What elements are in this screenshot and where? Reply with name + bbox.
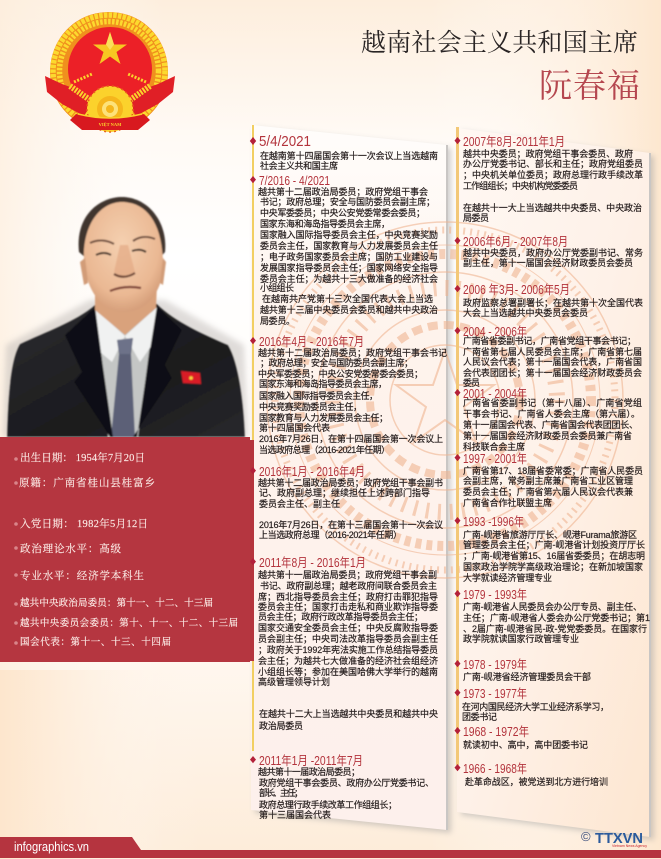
entry: 2011年8月 - 2016年1月: 员会副主任；中央司法改革指导委员会副主任 [258, 633, 438, 644]
info: party join date: 入党日期： 1982年5月12日 [20, 517, 148, 530]
logo: TTXVN [581, 829, 647, 848]
entry: 2016年4月 - 2016年7月 [250, 335, 447, 455]
entry: 7/2016 - 4/2021: 越共第十三届中央委员会委员和越共中央政治 [260, 304, 438, 315]
entry: 2007年8月-2011年1月: ；中央机关单位委员；政府总理行政手续改革 [463, 169, 643, 180]
entry: 2001 - 2004年: 广南省省委副书记（第十八届）、广南省党组 [463, 397, 642, 408]
entry: 7/2016 - 4/2021: 国家融入国际指导委员会主任，中央竞赛奖励 [260, 229, 438, 240]
panel: personal information [0, 437, 250, 662]
entry: 7/2016 - 4/2021: 中央军委委员；中央公安党委常委会委员； [260, 207, 425, 218]
entry: 2011年8月 - 2016年1月: 高级管理领导计划 [258, 676, 330, 687]
entry: 2006年3月 - 2006年5月: 2006 年3月- 2006年5月 [463, 283, 570, 297]
entry: 1978 - 1979年: 1978 - 1979年 [463, 658, 527, 672]
entry: 1966 - 1968年: 赴革命战区，被党送到北方进行培训 [465, 776, 608, 787]
entry: 7/2016 - 4/2021: 书记；政府总理；安全与国防委员会副主席； [260, 196, 435, 207]
entry: 1993 -1996年: 国家政治学院学高级政治理论；在新加坡国家 [463, 561, 643, 572]
entry: 2016年1月 - 2016年4月: 2016年1月 - 2016年4月 [259, 465, 365, 479]
entry: 2007年8月-2011年1月: 越共中央委员；政府党组干事会委员、政府 [463, 148, 633, 159]
entry: 7/2016 - 4/2021: 7/2016 - 4/2021 [259, 174, 330, 188]
entry: 1979 - 1993年 [454, 588, 650, 644]
entry: 2011年1月 -2011年7月: 部长、主任； [259, 787, 303, 798]
entry: 2011年1月 -2011年7月: 越共第十一届政治局委员； [258, 766, 360, 777]
icon: national emblem of Vietnam [45, 12, 175, 132]
entry: 2011年8月 - 2016年1月: 2011年8月 - 2016年1月 [259, 556, 366, 570]
entry: 2016年1月 - 2016年4月: 2016年7月26日，在第十三届国会第十一次会议 [259, 519, 443, 530]
entry: 2016年1月 - 2016年4月: 委员会主任、副主任 [259, 498, 340, 509]
entry: 7/2016 - 4/2021: 委员会主任；为越共十三大做准备的经济社会 [260, 273, 438, 284]
entry: 2006年3月 - 2006年5月: 大会上当选越共中央委员会委员 [463, 307, 588, 318]
entry: 5/4/2021: 在越南第十四届国会第十一次会议上当选越南 [260, 150, 438, 161]
title [361, 29, 640, 105]
entry: 2011年8月 - 2016年1月: ；政府关于1992年宪法实施工作总结指导委员 [258, 644, 438, 655]
entry: 2004 - 2006年: 会代表团团长；第十一届国会经济财政委员会 [463, 367, 642, 378]
entry: 7/2016 - 4/2021: 小组组长 [260, 282, 294, 293]
entry: 2004 - 2006年: 人民议会代表；第十一届国会代表，广南省国 [463, 356, 642, 367]
entry: 1993 -1996年 [454, 515, 645, 583]
entry: 2011年8月 - 2016年1月: 席；西北指导委员会主任；政府打击罪犯指导 [258, 591, 438, 602]
entry: 1979 - 1993年: 主任；广南-岘港省人委会办公厅党委书记；第1 [463, 612, 650, 623]
entry: 2007年8月-2011年1月: 在越共十一大上当选越共中央委员、中央政治 [463, 202, 642, 213]
panel: left timeline paper [251, 125, 451, 833]
entry: 7/2016 - 4/2021: ；电子政务国家委员会主席；国防工业建设与 [260, 251, 438, 262]
entry: 2011年1月 -2011年7月 [250, 754, 434, 820]
entry: 1973 - 1977年: 在河内国民经济大学工业经济系学习， [462, 701, 609, 712]
entry: 2011年8月 - 2016年1月: 委员会主任；国家打击走私和商业欺诈指导委 [258, 601, 438, 612]
panel: right timeline paper [457, 128, 654, 840]
entry: 2016年1月 - 2016年4月: 上当选政府总理（2016-2021年任期） [259, 529, 402, 540]
entry: 1973 - 1977年: 1973 - 1977年 [463, 687, 527, 701]
entry: 2016年1月 - 2016年4月: 记、政府副总理；继续担任上述跨部门指导 [259, 487, 430, 498]
entry: 2011年1月 -2011年7月: 政府党组干事会委员、政府办公厅党委书记、 [259, 777, 434, 788]
source: infographics.vn: infographics.vn [14, 840, 89, 854]
entry: 2001 - 2004年: 第十一届国会代表、广南省国会代表团团长、 [463, 419, 638, 430]
entry: 2011年8月 - 2016年1月: 越共第十一届政治局委员；政府党组干事会副 [258, 569, 437, 580]
entry: 2016年4月 - 2016年7月: 国家东海和海岛指导委员会主席， [259, 378, 387, 389]
entry: 2004 - 2006年 [454, 325, 642, 388]
entry: 1968 - 1972年 [454, 725, 588, 750]
footer bar [0, 837, 661, 858]
entry: 1997 - 2001年: 广南省合作社联盟主席 [463, 497, 552, 508]
entry: 2011年1月 -2011年7月: 第十三届国会代表 [259, 809, 331, 820]
logo: TTXVN: Vietnam News Agency [612, 844, 647, 848]
portrait: Nguyen Xuan Phuc [3, 197, 248, 437]
entry: 2011年8月 - 2016年1月 [250, 556, 438, 731]
entry: 2011年8月 - 2016年1月: 书记、政府副总理；越老政府间联合委员会主 [260, 580, 437, 591]
entry: 2007年8月-2011年1月: 办公厅党委书记、部长和主任；政府党组委员 [463, 158, 643, 169]
entry: 2001 - 2004年: 干事会书记、广南省人委会主席（第六届）。 [463, 408, 640, 419]
info: native place: 原籍：广南省桂山县桂富乡 [19, 476, 155, 489]
entry: 1978 - 1979年: 广南-岘港省经济管理委员会干部 [463, 671, 591, 682]
entry: 1993 -1996年: 管理委员会主任；广南-岘港省计划投资厅厅长 [463, 539, 645, 550]
entry: 1979 - 1993年: 1979 - 1993年 [463, 588, 527, 602]
entry: 2006年6月 - 2007年8月 [454, 235, 643, 268]
timeline axis: right [456, 127, 459, 765]
info: professional level: 专业水平：经济学本科生 [20, 569, 144, 582]
entry: 1979 - 1993年: 、2届广南-岘港省民-政-党党委委员。在国家行 [463, 623, 647, 634]
entry: 2006年6月 - 2007年8月: 2006年6月 - 2007年8月 [463, 235, 568, 249]
entry: 2016年4月 - 2016年7月: ；政府总理；安全与国防委员会副主席； [260, 357, 413, 368]
entry: 1997 - 2001年: 委员会主任；广南省第六届人民议会代表兼 [463, 486, 633, 497]
entry: 7/2016 - 4/2021: 越共第十二届政治局委员；政府党组干事会 [258, 186, 428, 197]
entry: 2011年8月 - 2016年1月: 会主任；为越共七大做准备的经济社会组经济 [258, 655, 438, 666]
entry: 1993 -1996年: 1993 -1996年 [463, 515, 524, 529]
subtitle: name: 阮春福 [539, 68, 640, 105]
entry: 2011年1月 -2011年7月: 2011年1月 -2011年7月 [259, 754, 363, 768]
entry: 7/2016 - 4/2021: 发展国家指导委员会主任；国家网络安全指导 [260, 262, 438, 273]
entry: 2016年1月 - 2016年4月: 越共第十二届政治局委员；政府党组干事会副书 [258, 477, 443, 488]
entry: 1966 - 1968年 [454, 762, 608, 787]
entry: 2016年4月 - 2016年7月: 国家融入国际指导委员会主任， [259, 390, 378, 401]
entry: 7/2016 - 4/2021 [250, 174, 438, 326]
entry: 2006年6月 - 2007年8月: 副主任，第十一届国会经济财政委员会委员 [463, 257, 633, 268]
entry: 2011年8月 - 2016年1月: 小组组长等；参加在美国哈佛大学举行的越南 [258, 666, 438, 677]
entry: 1997 - 2001年: 1997 - 2001年 [463, 452, 527, 466]
entry: 1968 - 1972年: 就读初中、高中，高中团委书记 [463, 739, 588, 750]
entry: 2011年8月 - 2016年1月: 政治局委员 [259, 720, 303, 731]
entry: 2011年1月 -2011年7月: 政府总理行政手续改革工作组组长； [259, 799, 397, 810]
entry: 2001 - 2004年: 2001 - 2004年 [463, 387, 527, 401]
entry: 1973 - 1977年 [454, 687, 609, 722]
entry: 1997 - 2001年 [454, 452, 643, 508]
entry: 7/2016 - 4/2021: 国家东海和海岛指导委员会主席， [260, 218, 390, 229]
entry: 2004 - 2006年: 广南省省委副书记，广南省党组干事会书记； [463, 335, 636, 346]
entry: 1968 - 1972年: 1968 - 1972年 [463, 725, 529, 739]
entry: 1966 - 1968年: 1966 - 1968年 [463, 762, 527, 776]
entry: 5/4/2021 [250, 134, 438, 171]
entry: 2011年8月 - 2016年1月: 国家交通安全委员会主任；中央反腐败指导委 [258, 622, 438, 633]
entry: 2016年4月 - 2016年7月: 第十四届国会代表 [259, 422, 330, 433]
entry: 2007年8月-2011年1月: 工作组组长；中央机构党委委员 [463, 180, 578, 191]
entry: 1979 - 1993年: 政学院就读国家行政管理专业 [463, 633, 579, 644]
logo: TTXVN: TTXVN [595, 830, 643, 847]
entry: 5/4/2021: 5/4/2021 [259, 134, 311, 150]
info: politburo member: 越共中央政治局委员：第十一、十二、十三届 [20, 597, 213, 609]
entry: 2004 - 2006年: 2004 - 2006年 [463, 325, 527, 339]
logo: TTXVN: © [581, 829, 591, 844]
entry: 2016年4月 - 2016年7月: 越共第十二届政治局委员；政府党组干事会书记 [258, 347, 447, 358]
entry: 1978 - 1979年 [454, 658, 591, 682]
entry: 1993 -1996年: ；广南-岘港省第15、16届省委委员；在胡志明 [463, 550, 645, 561]
entry: 2001 - 2004年: 第十一届国会经济财政委员会委员兼广南省 [463, 430, 632, 441]
entry: 2016年4月 - 2016年7月: 国家教育与人力发展委员会主任； [259, 412, 388, 423]
entry: 2007年8月-2011年1月 [454, 135, 643, 223]
entry: 2011年8月 - 2016年1月: 在越共十二大上当选越共中央委员和越共中央 [259, 708, 438, 719]
entry: 2007年8月-2011年1月: 2007年8月-2011年1月 [463, 135, 565, 149]
entry: 2007年8月-2011年1月: 局委员 [463, 212, 489, 223]
entry: 2006年3月 - 2006年5月 [454, 283, 643, 318]
timeline axis: left [250, 125, 254, 751]
entry: 2004 - 2006年: 广南省第七届人民委员会主席；广南省第七届 [463, 346, 642, 357]
entry: 7/2016 - 4/2021: 局委员。 [260, 315, 295, 326]
entry: 2006年6月 - 2007年8月: 越共中央委员，政府办公厅党委副书记、常务 [463, 247, 643, 258]
info: political theory level: 政治理论水平：高级 [20, 542, 122, 555]
entry: 2004 - 2006年: 委员 [463, 377, 480, 388]
entry: 2016年4月 - 2016年7月: 2016年7月26日，在第十四届国会第一次会议上 [259, 433, 443, 444]
entry: 2016年4月 - 2016年7月: 2016年4月 - 2016年7月 [259, 335, 364, 349]
entry: 1997 - 2001年: 会副主席，常务副主席兼广南省工业区管理 [463, 475, 633, 486]
entry: 1993 -1996年: 广南-岘港省旅游厅厅长、岘港Furama旅游区 [463, 529, 637, 540]
entry: 1993 -1996年: 大学就读经济管理专业 [463, 572, 552, 583]
entry: 2006年3月 - 2006年5月: 政府监察总署副署长；在越共第十次全国代表 [463, 297, 643, 308]
entry: 2001 - 2004年: 科技联合会主席 [463, 441, 525, 452]
info: central committee member: 越共中央委员会委员：第十、十一、十二、十三届 [20, 617, 238, 629]
title: 越南社会主义共和国主席 [361, 29, 638, 57]
entry: 1979 - 1993年: 广南-岘港省人民委员会办公厅专员、副主任、 [463, 601, 642, 612]
entry: 2016年4月 - 2016年7月: 中央竞赛奖励委员会主任， [259, 401, 362, 412]
info: date of birth: 出生日期： 1954年7月20日 [20, 451, 145, 464]
entry: 7/2016 - 4/2021: 在越南共产党第十三次全国代表大会上当选 [262, 293, 433, 304]
entry: 2016年4月 - 2016年7月: 当选政府总理（2016-2021年任期） [259, 444, 390, 455]
entry: 1997 - 2001年: 广南省第17、18届省委常委；广南省人民委员 [463, 465, 643, 476]
entry: 7/2016 - 4/2021: 委员会主任，国家教育与人力发展委员会主任 [260, 240, 438, 251]
entry: 2001 - 2004年 [454, 387, 642, 452]
icon: national emblem of Vietnam: VIỆT NAM [99, 122, 122, 127]
watermark: emblem background [267, 222, 623, 578]
entry: 2011年8月 - 2016年1月: 员会主任；政府行政改革指导委员会主任； [258, 611, 423, 622]
entry: 5/4/2021: 社会主义共和国主席 [260, 160, 338, 171]
entry: 1973 - 1977年: 团委书记 [462, 711, 497, 722]
entry: 2016年4月 - 2016年7月: 中央军委委员；中央公安党委常委会委员； [258, 368, 423, 379]
info: national assembly deputy: 国会代表：第十一、十三、十四届 [20, 636, 171, 648]
entry: 2016年1月 - 2016年4月 [250, 465, 443, 540]
